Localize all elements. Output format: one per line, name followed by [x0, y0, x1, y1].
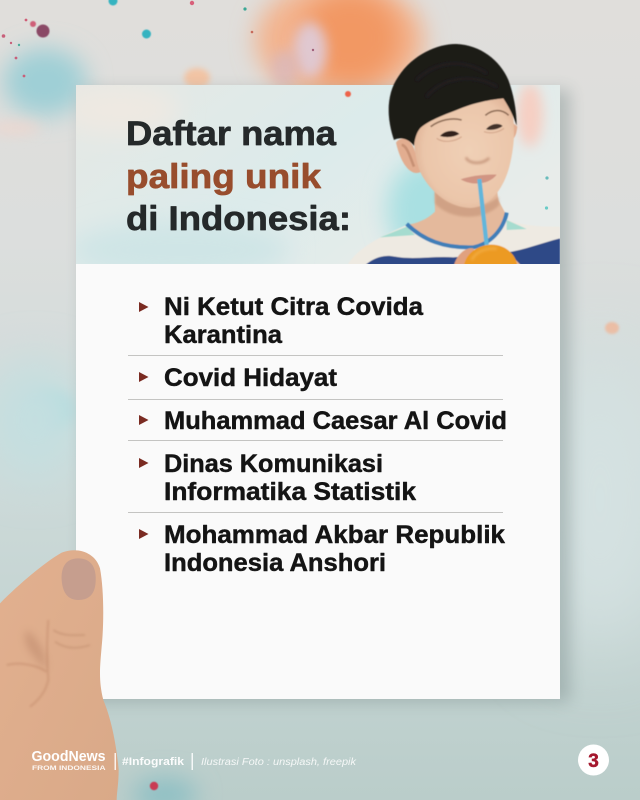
- logo: GoodNews from Indonesia: [32, 749, 106, 772]
- logo: GoodNews from Indonesia: FROM INDONESIA: [32, 765, 106, 772]
- mouth: [461, 175, 497, 184]
- footer credits: [32, 749, 357, 772]
- orange: [464, 245, 517, 265]
- page number badge: 3: [588, 751, 599, 772]
- name: Ni Ketut Citra Covida Karantina: [164, 293, 424, 349]
- face: [414, 93, 514, 208]
- collar: [407, 213, 507, 247]
- nose: [466, 157, 489, 163]
- title: Daftar nama: [126, 115, 337, 153]
- name: Dinas Komunikasi Informatika Statistik: Informatika Statistik: [164, 478, 416, 506]
- card shadow: [82, 90, 570, 702]
- logo: GoodNews from Indonesia: GoodNews: [32, 749, 106, 765]
- list of names: [139, 293, 507, 577]
- panel: header with watercolour background: [76, 85, 560, 264]
- name: Ni Ketut Citra Covida Karantina: Karantina: [164, 321, 283, 349]
- ear: [396, 139, 421, 173]
- name: Covid Hidayat: Covid Hidayat: [164, 364, 338, 392]
- name: Muhammad Caesar Al Covid: Muhammad Caesar Al Covid: [164, 407, 507, 435]
- name: Mohammad Akbar Republik Indonesia Anshori: Indonesia Anshori: [164, 549, 386, 577]
- name: Dinas Komunikasi Informatika Statistik: [164, 450, 416, 506]
- title: [126, 115, 351, 238]
- fingers: [454, 247, 474, 264]
- bullet markers: [139, 302, 148, 539]
- name: Mohammad Akbar Republik Indonesia Anshori: Mohammad Akbar Republik: [164, 521, 505, 549]
- page number badge: [578, 744, 609, 776]
- eyebrows: [431, 111, 509, 127]
- name: Mohammad Akbar Republik Indonesia Anshori: [164, 521, 505, 577]
- hair: [389, 44, 517, 146]
- photo credit: Ilustrasi Foto : unsplash, freepik: [201, 757, 357, 768]
- neck: [410, 192, 506, 246]
- title: di Indonesia:: [126, 200, 351, 238]
- thumbnail: [62, 558, 96, 600]
- shirt: [348, 220, 560, 267]
- hashtag: #Infografik: [122, 756, 185, 768]
- name: Ni Ketut Citra Covida Karantina: Ni Ketut Citra Covida: [164, 293, 424, 321]
- photo: boy drinking from an orange with a straw: [348, 44, 560, 267]
- title: paling unik: [126, 158, 321, 196]
- eyes: [440, 131, 459, 137]
- panel: white card: [76, 85, 560, 699]
- photo: hand holding the card: [0, 550, 119, 800]
- straw: [479, 179, 487, 245]
- name: Dinas Komunikasi Informatika Statistik: Dinas Komunikasi: [164, 450, 383, 478]
